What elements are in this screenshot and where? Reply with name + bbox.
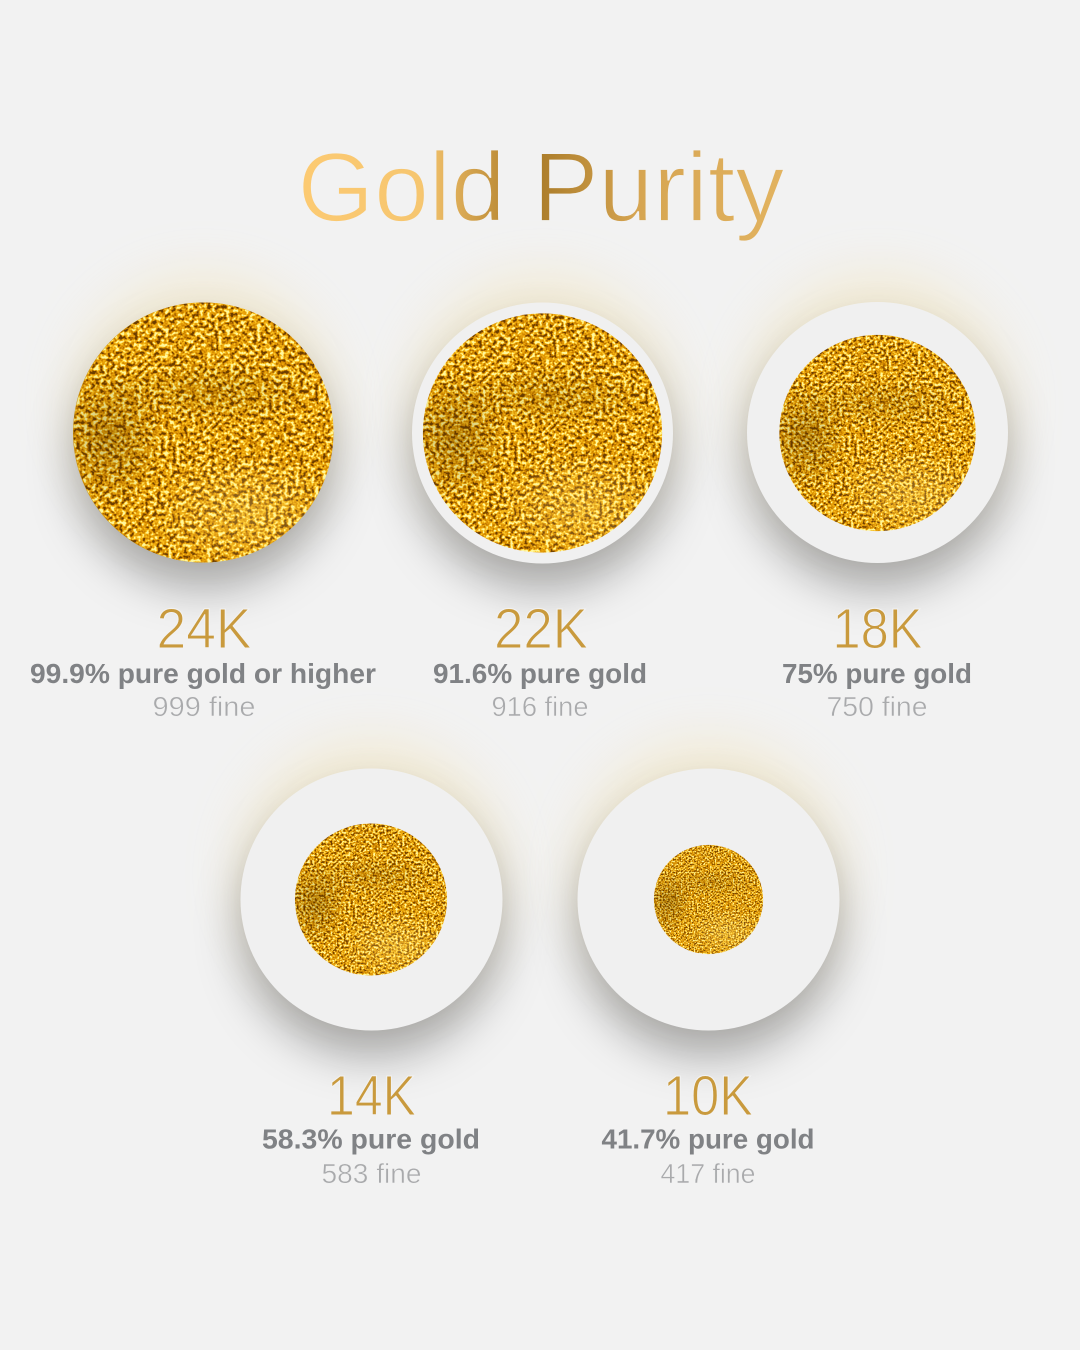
gold circle: 14K (240, 768, 502, 1030)
fineness: 417: 417 fine (660, 1158, 756, 1189)
fineness: 583: 583 fine (322, 1158, 422, 1189)
purity: 41.7%: 41.7% pure gold (602, 1124, 814, 1154)
label: 18K: 18K (832, 597, 922, 661)
gold circle: 22K (404, 302, 676, 564)
panel: 14K (240, 768, 502, 1189)
fineness: 750: 750 fine (826, 691, 928, 722)
panel: 18K (747, 302, 1008, 722)
title: Gold Purity (298, 132, 784, 242)
fineness: 916: 916 fine (492, 691, 588, 722)
label: 24K: 24K (156, 597, 252, 661)
purity: 99.9%: 99.9% pure gold or higher (30, 658, 376, 689)
purity: 91.6%: 91.6% pure gold (433, 658, 647, 689)
label: 22K: 22K (494, 597, 588, 661)
purity: 58.3%: 58.3% pure gold (262, 1124, 480, 1154)
fineness: 999: 999 fine (152, 691, 256, 722)
gold circle: 10K (578, 768, 840, 1030)
gold circle: 24K (54, 302, 348, 572)
purity: 75%: 75% pure gold (782, 658, 972, 689)
panel: 22K (404, 302, 676, 722)
label: 14K: 14K (327, 1064, 416, 1128)
label: 10K: 10K (663, 1064, 753, 1128)
panel: 24K (30, 302, 376, 722)
panel: 10K (578, 768, 840, 1189)
gold circle: 18K (747, 302, 1008, 563)
